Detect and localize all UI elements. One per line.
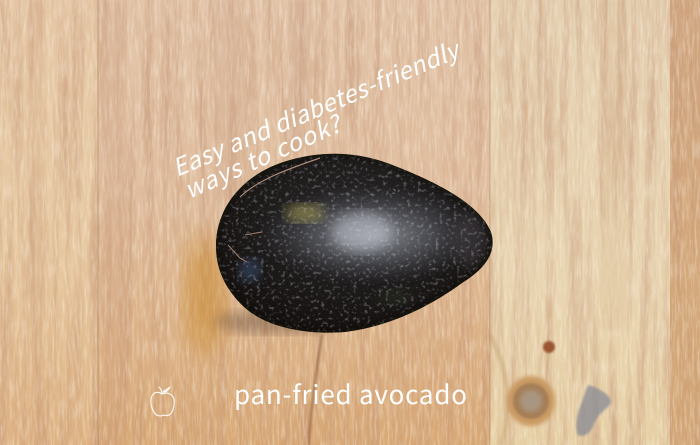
shadow under avocado [215,310,335,334]
heading: Easy and diabetes-friendly ways to cook?: ways to cook? [178,104,349,205]
icon: apple [151,387,174,416]
heading: Easy and diabetes-friendly ways to cook?: Easy and diabetes-friendly [166,30,466,183]
wood knot and marks [490,335,611,445]
avocado [210,148,500,338]
caption: pan-fried avocado: pan-fried avocado [234,375,467,412]
